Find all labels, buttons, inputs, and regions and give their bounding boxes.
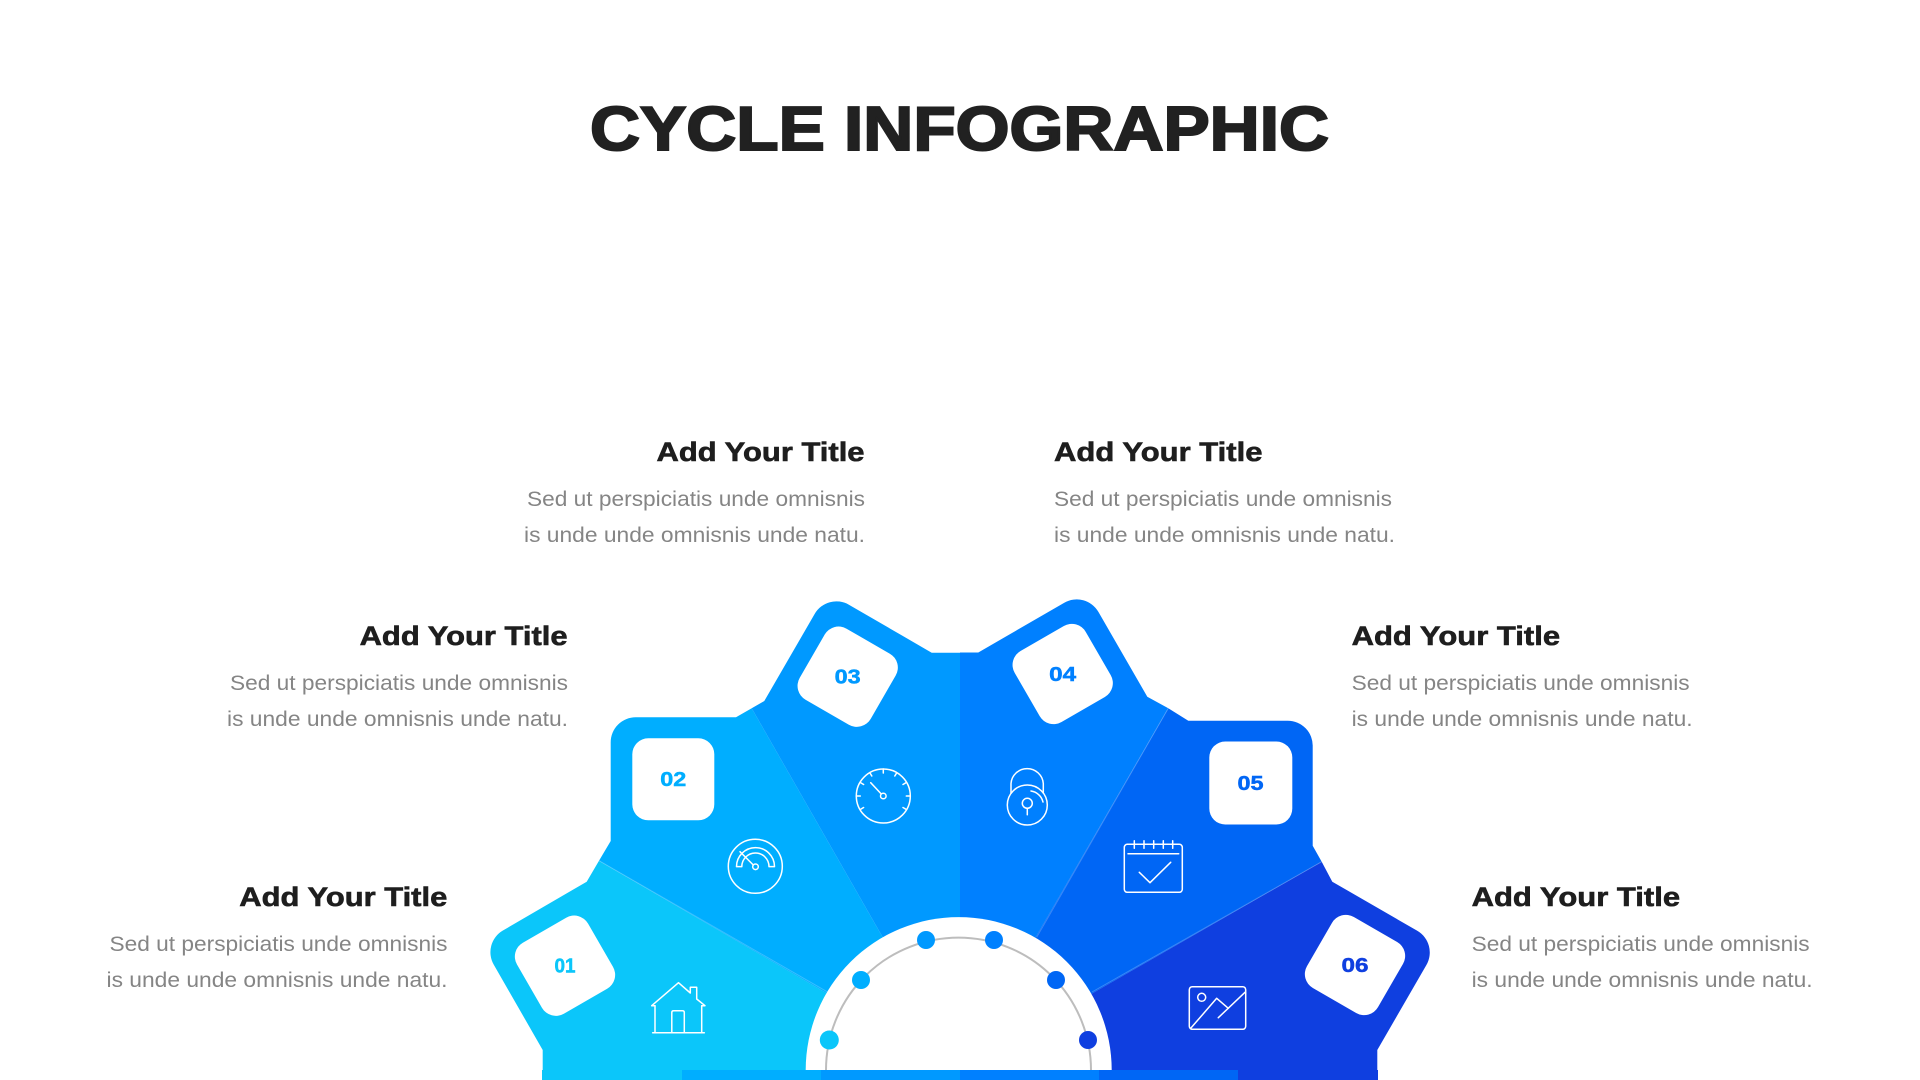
badge 02: 02 bbox=[660, 769, 686, 791]
text block: step 01: is unde unde omnisnis unde natu. bbox=[106, 969, 448, 992]
text block: step 04: Sed ut perspiciatis unde omnisnis bbox=[1054, 488, 1392, 511]
text block: step 06: Add Your Title bbox=[1472, 882, 1680, 912]
icon: picture bbox=[1189, 987, 1246, 1029]
badge 01 bbox=[509, 910, 621, 1022]
text block: step 06: Sed ut perspiciatis unde omnisnis bbox=[1472, 933, 1810, 956]
badge 05 bbox=[1209, 742, 1292, 824]
text block: step 04 bbox=[1054, 437, 1395, 547]
badge 01: 01 bbox=[554, 956, 576, 978]
base band bbox=[542, 1070, 1378, 1080]
text block: step 01 bbox=[106, 882, 448, 992]
text block: step 04: is unde unde omnisnis unde natu. bbox=[1054, 524, 1395, 547]
text block: step 06: is unde unde omnisnis unde natu. bbox=[1472, 969, 1813, 992]
icon: dial bbox=[856, 769, 910, 823]
text block: step 02: is unde unde omnisnis unde natu. bbox=[227, 708, 568, 731]
panel: segment 04 bbox=[959, 599, 1168, 1070]
badge 06 bbox=[1299, 909, 1411, 1021]
text block: step 06 bbox=[1472, 882, 1813, 992]
faint divider lines bbox=[599, 708, 1322, 992]
icon: house bbox=[652, 983, 705, 1033]
badge 03: 03 bbox=[835, 667, 861, 689]
panel: segment 06 bbox=[959, 862, 1430, 1071]
badge 05: 05 bbox=[1238, 773, 1264, 795]
panel: segment 05 bbox=[959, 708, 1322, 1070]
central dial bbox=[806, 917, 1112, 1070]
text block: step 02: Add Your Title bbox=[360, 621, 568, 651]
text block: step 05: Sed ut perspiciatis unde omnisnis bbox=[1352, 672, 1690, 695]
text block: step 05: Add Your Title bbox=[1352, 621, 1560, 651]
badge 02 bbox=[632, 738, 714, 820]
panel: segment 02 bbox=[599, 708, 959, 1070]
text block: step 03: is unde unde omnisnis unde natu. bbox=[524, 524, 865, 547]
text block: step 05: is unde unde omnisnis unde natu. bbox=[1352, 708, 1693, 731]
panel: segment 01 bbox=[490, 861, 959, 1071]
text block: step 03: Add Your Title bbox=[656, 437, 864, 467]
badge 04: 04 bbox=[1049, 664, 1077, 686]
badge 04 bbox=[1007, 618, 1119, 730]
text block: step 03 bbox=[524, 437, 865, 547]
icon: padlock bbox=[1007, 769, 1047, 825]
text block: step 01: Add Your Title bbox=[239, 882, 447, 912]
text block: step 02: Sed ut perspiciatis unde omnisnis bbox=[230, 672, 568, 695]
title: CYCLE INFOGRAPHIC bbox=[590, 95, 1329, 164]
text block: step 04: Add Your Title bbox=[1054, 437, 1262, 467]
badge 03 bbox=[792, 621, 904, 733]
text block: step 05 bbox=[1352, 621, 1693, 731]
icon: gauge bbox=[728, 839, 782, 893]
panel: segment 03 bbox=[752, 601, 960, 1070]
text block: step 01: Sed ut perspiciatis unde omnisnis bbox=[110, 933, 448, 956]
icon: calendar bbox=[1124, 841, 1182, 892]
text block: step 03: Sed ut perspiciatis unde omnisnis bbox=[527, 488, 865, 511]
badge 06: 06 bbox=[1342, 955, 1368, 977]
text block: step 02 bbox=[227, 621, 568, 731]
